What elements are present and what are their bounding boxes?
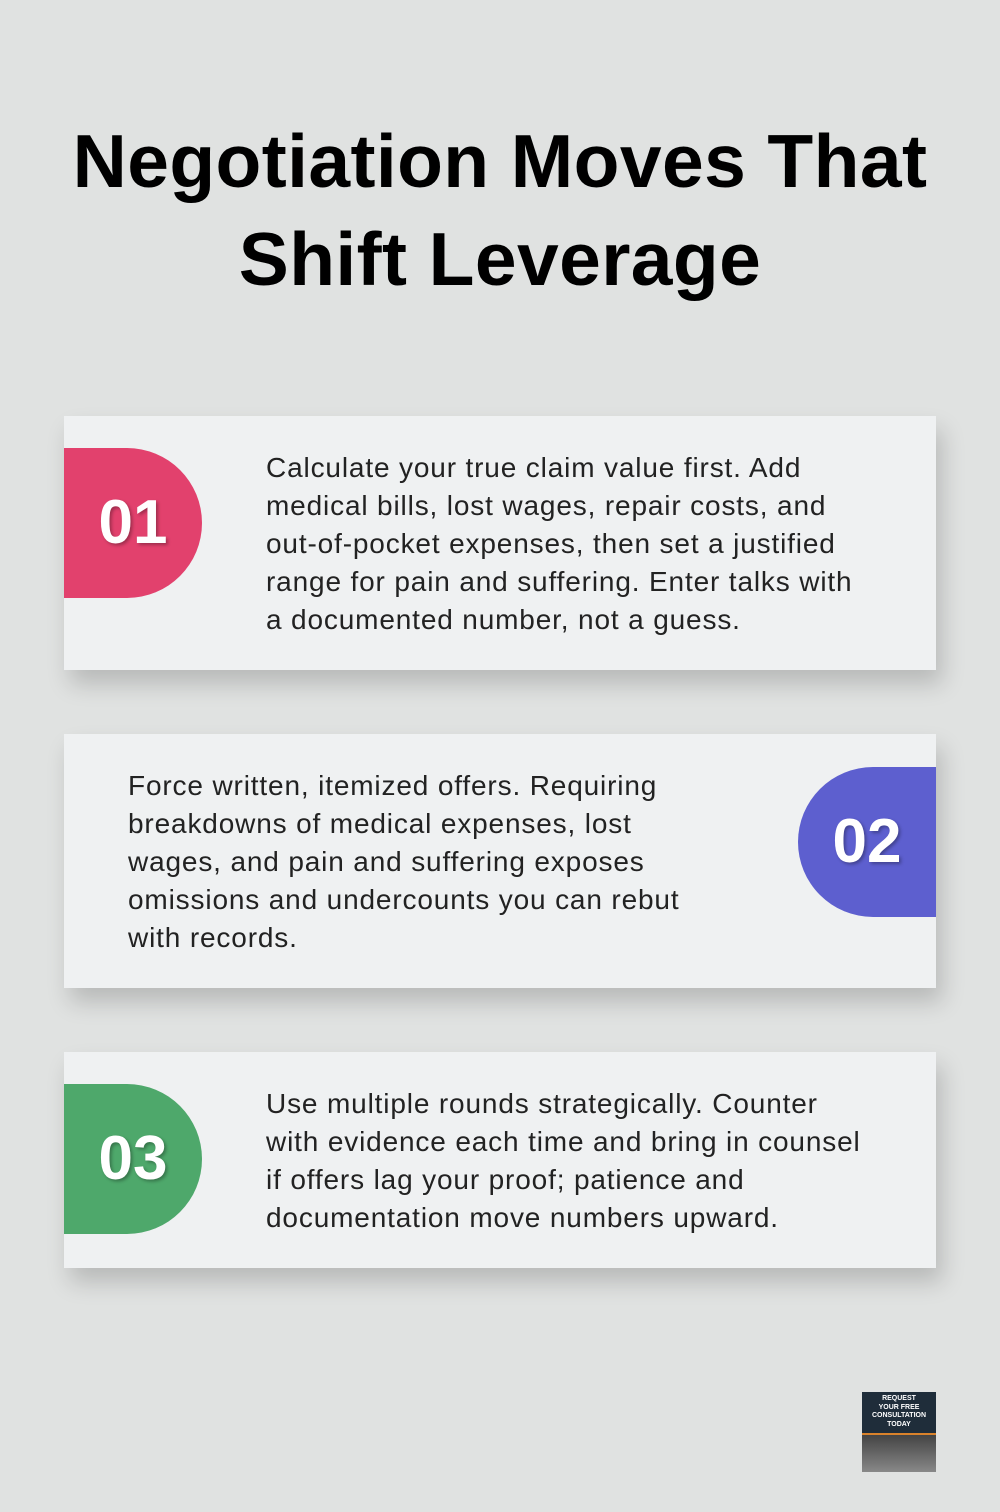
text 3: if offers lag your proof; patience and <box>266 1164 745 1195</box>
title: Negotiation Moves That <box>73 119 927 203</box>
card 2 <box>64 734 936 988</box>
badge 01: 01 <box>99 488 167 557</box>
text 2: breakdowns of medical expenses, lost <box>128 808 632 839</box>
card 1 <box>64 416 936 670</box>
logo: consultation badge: CONSULTATION <box>872 1412 926 1419</box>
text 1: Calculate your true claim value first. Add <box>266 452 801 483</box>
text 1: out-of-pocket expenses, then set a justified <box>266 528 836 559</box>
badge 02 <box>798 767 936 917</box>
logo: consultation badge: REQUEST <box>882 1395 916 1402</box>
text 2 <box>128 770 679 953</box>
logo: consultation badge <box>862 1392 936 1472</box>
text 3: with evidence each time and bring in counsel <box>266 1126 861 1157</box>
logo: consultation badge: YOUR FREE <box>879 1404 919 1410</box>
title: Shift Leverage <box>239 217 761 301</box>
text 3 <box>266 1088 861 1233</box>
text 1: medical bills, lost wages, repair costs, and <box>266 490 826 521</box>
badge 01 <box>64 448 202 598</box>
text 2: with records. <box>128 922 298 953</box>
text 1 <box>266 452 852 635</box>
text 2: Force written, itemized offers. Requiring <box>128 770 657 801</box>
text 2: wages, and pain and suffering exposes <box>128 846 645 877</box>
text 2: omissions and undercounts you can rebut <box>128 884 679 915</box>
card 3 <box>64 1052 936 1268</box>
title <box>73 119 927 301</box>
text 3: documentation move numbers upward. <box>266 1202 779 1233</box>
text 3: Use multiple rounds strategically. Counter <box>266 1088 818 1119</box>
text 1: a documented number, not a guess. <box>266 604 741 635</box>
text 1: range for pain and suffering. Enter talks with <box>266 566 852 597</box>
logo: consultation badge: TODAY <box>887 1420 911 1428</box>
badge 03: 03 <box>99 1124 167 1193</box>
badge 03 <box>64 1084 202 1234</box>
badge 02: 02 <box>833 807 901 876</box>
